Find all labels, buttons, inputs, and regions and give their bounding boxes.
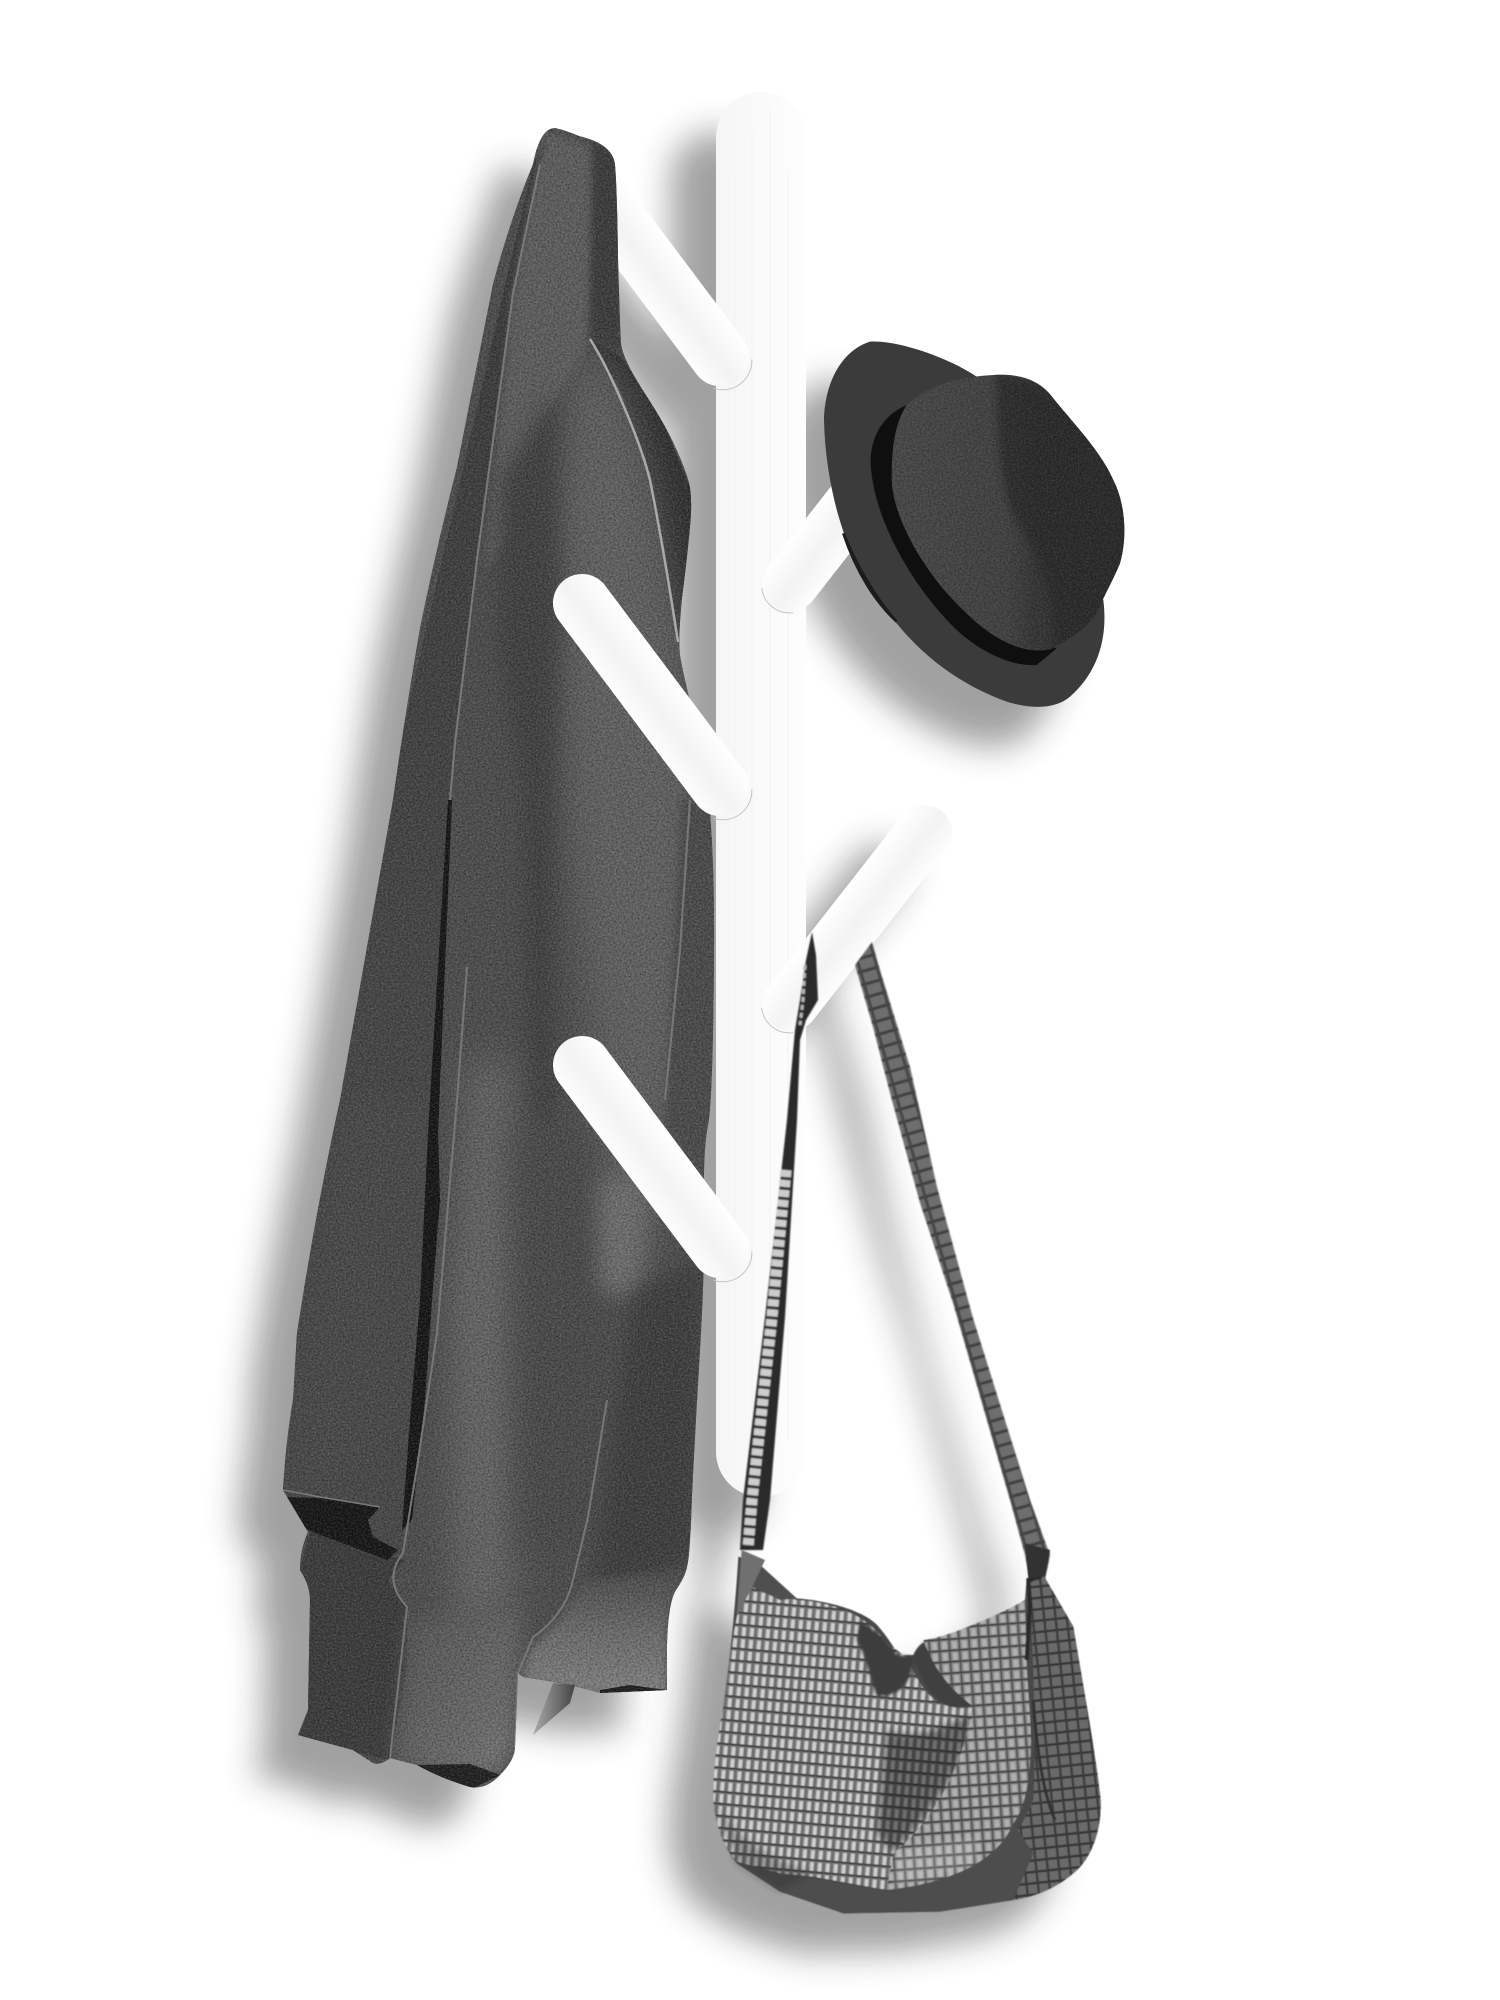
wall shadows xyxy=(238,132,1059,1953)
coat xyxy=(270,120,730,1800)
hook: lower left xyxy=(541,1024,763,1293)
bag xyxy=(713,1543,1101,1913)
bag strap: left xyxy=(740,932,818,1550)
coat tag xyxy=(533,1683,575,1735)
hook: top left end cap on pole xyxy=(637,260,763,401)
hook: top left (behind coat) xyxy=(541,132,761,398)
coat rack illustration xyxy=(217,103,1124,1976)
hook: lower right (holds bag) xyxy=(750,794,963,1044)
hat xyxy=(824,342,1124,707)
bag body panels xyxy=(713,1543,1101,1913)
bag strap: right xyxy=(855,942,1050,1580)
hook: upper right (holds hat) xyxy=(750,374,963,624)
pole xyxy=(716,92,806,1497)
hook: middle left xyxy=(541,562,763,831)
coat folds and panels xyxy=(270,120,730,1800)
